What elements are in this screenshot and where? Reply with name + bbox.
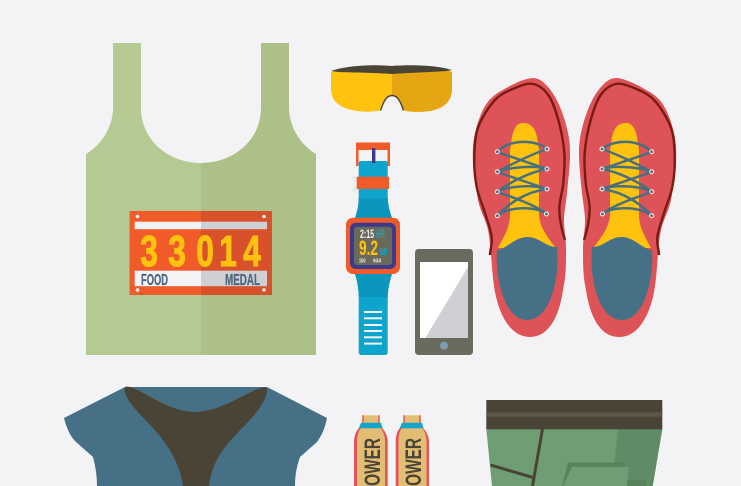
watch case and display: HR <box>376 229 385 241</box>
tank right-side shading <box>201 43 316 355</box>
watch case and display: MI <box>380 247 387 258</box>
panel: blue t-shirt <box>64 387 327 486</box>
icon: smart watch <box>346 142 400 355</box>
icon: second power drink bottle: OWER <box>402 438 427 486</box>
icon: first power drink bottle: OWER <box>361 438 386 486</box>
watch case and display: 934 <box>373 259 382 265</box>
bib number <box>140 227 261 276</box>
shoe eyelets <box>495 147 549 218</box>
watch case and display: 9.2 <box>359 237 378 260</box>
shoe stitching line <box>474 84 565 255</box>
icon: smartphone <box>415 249 473 355</box>
icon: right running shoe <box>579 78 676 337</box>
shoe sole <box>497 237 558 320</box>
watch case and display: 150 <box>359 259 366 265</box>
icon: yellow sunglasses <box>331 65 452 112</box>
watch strap <box>355 161 392 218</box>
panel: green running tank top with race bib <box>86 43 316 355</box>
bib number: 4 <box>243 227 261 276</box>
shirt collar <box>125 387 267 486</box>
icon: first power drink bottle <box>354 415 388 486</box>
bib label: medal: MEDAL <box>225 272 260 289</box>
bib number: 1 <box>219 227 237 276</box>
bib number: 3 <box>140 227 158 276</box>
bib number: 0 <box>196 227 214 276</box>
icon: second power drink bottle <box>396 415 429 486</box>
shorts seams <box>490 429 542 486</box>
watch case and display: 2:15 <box>360 229 374 241</box>
shorts waistband <box>486 400 662 429</box>
shorts pocket <box>562 462 646 486</box>
icon: left running shoe <box>473 78 570 337</box>
panel: green running shorts <box>486 400 662 486</box>
shoe tongue <box>498 123 556 248</box>
shoe laces <box>497 142 547 216</box>
watch case and display <box>346 218 400 274</box>
tank body <box>86 43 316 355</box>
shorts shaded side panel <box>612 429 662 486</box>
race bib <box>130 211 272 295</box>
watch buckle <box>356 142 390 166</box>
bib label: food: FOOD <box>141 272 168 289</box>
bib number: 3 <box>168 227 186 276</box>
